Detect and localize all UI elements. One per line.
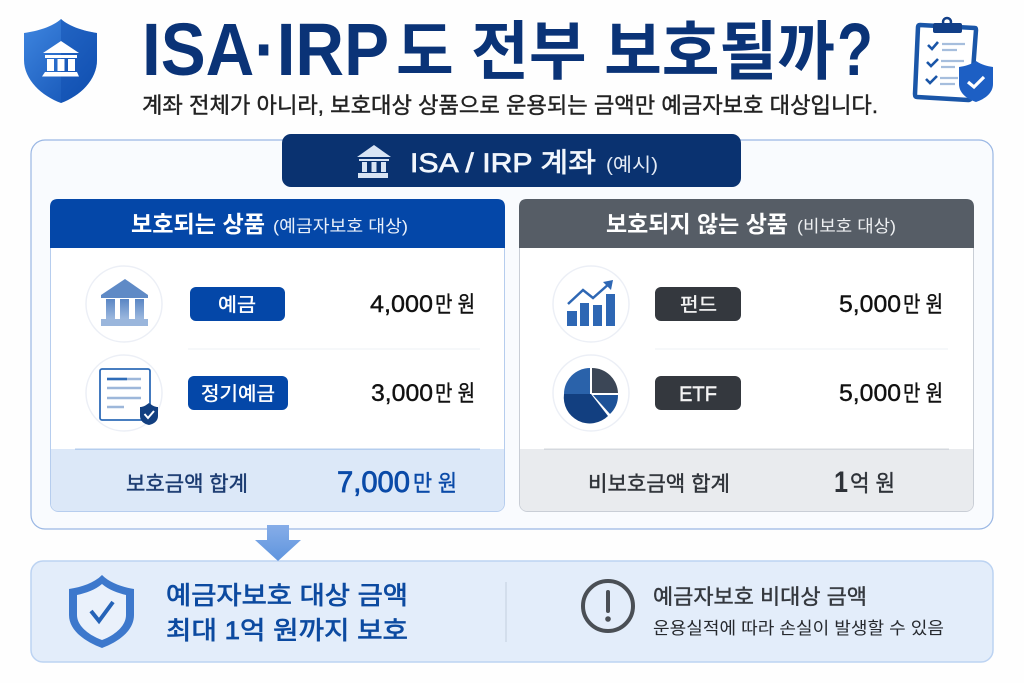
row: deposit: 만 원 [435,292,475,317]
protection limit text: 예금자보호 대상 금액 [166,582,408,610]
icon: warning circle [583,581,633,631]
title: 도 전부 보호될까 [396,16,835,88]
row: fund [553,266,943,342]
unprotected total [588,466,895,499]
icon: bank shield [24,19,97,103]
protected total: 만 원 [413,470,457,496]
row: ETF: ETF [679,383,717,406]
arrow: down to summary [255,525,301,561]
row: time deposit: 만 원 [435,381,475,406]
row: deposit: 4,000 [370,291,433,318]
subtitle: 계좌 전체가 아니라, 보호대상 상품으로 운용되는 금액만 예금자보호 대상입니다. [142,93,878,118]
non-protected note: 운용실적에 따라 손실이 발생할 수 있음 [653,619,944,638]
row: time deposit: 3,000 [371,380,433,407]
unprotected header text: (비보호 대상) [797,217,896,236]
icon: clipboard with shield [915,18,993,102]
protected header text [131,211,408,237]
account header bar [282,134,741,187]
row: ETF: 만 원 [903,381,943,406]
row: ETF [553,355,943,431]
title: ? [837,8,873,91]
protected total: 보호금액 합계 [126,473,248,496]
row: deposit: 예금 [218,294,256,316]
panel: protected products [50,199,505,512]
row: fund: 펀드 [680,294,717,316]
row: ETF: 5,000 [839,380,901,407]
protected total: 7,000 [337,466,410,499]
title [142,8,873,91]
panel: bottom summary [31,561,993,662]
panel: account container [31,134,993,529]
account header bar: (예시) [606,154,658,176]
protection limit text: 최대 1억 원까지 보호 [166,617,408,645]
unprotected total: 1 [834,466,848,499]
protection limit text [166,582,408,645]
title: ISA·IRP [142,8,389,91]
protected header text: 보호되는 상품 [131,211,265,237]
unprotected header text [606,211,896,237]
non-protected note: 예금자보호 비대상 금액 [653,586,867,609]
row: deposit [86,266,475,342]
unprotected total: 억 원 [850,470,895,496]
row: fund: 5,000 [839,291,901,318]
non-protected note [653,586,944,638]
account header bar: ISA / IRP 계좌 [410,148,596,178]
row: time deposit [86,355,475,431]
row: time deposit: 정기예금 [201,383,275,405]
unprotected header text: 보호되지 않는 상품 [606,211,788,237]
protected total [126,466,457,499]
row: fund: 만 원 [903,292,943,317]
icon: check shield [69,575,134,648]
protected header text: (예금자보호 대상) [273,217,408,236]
panel: unprotected products [519,199,974,512]
unprotected total: 비보호금액 합계 [588,473,730,496]
